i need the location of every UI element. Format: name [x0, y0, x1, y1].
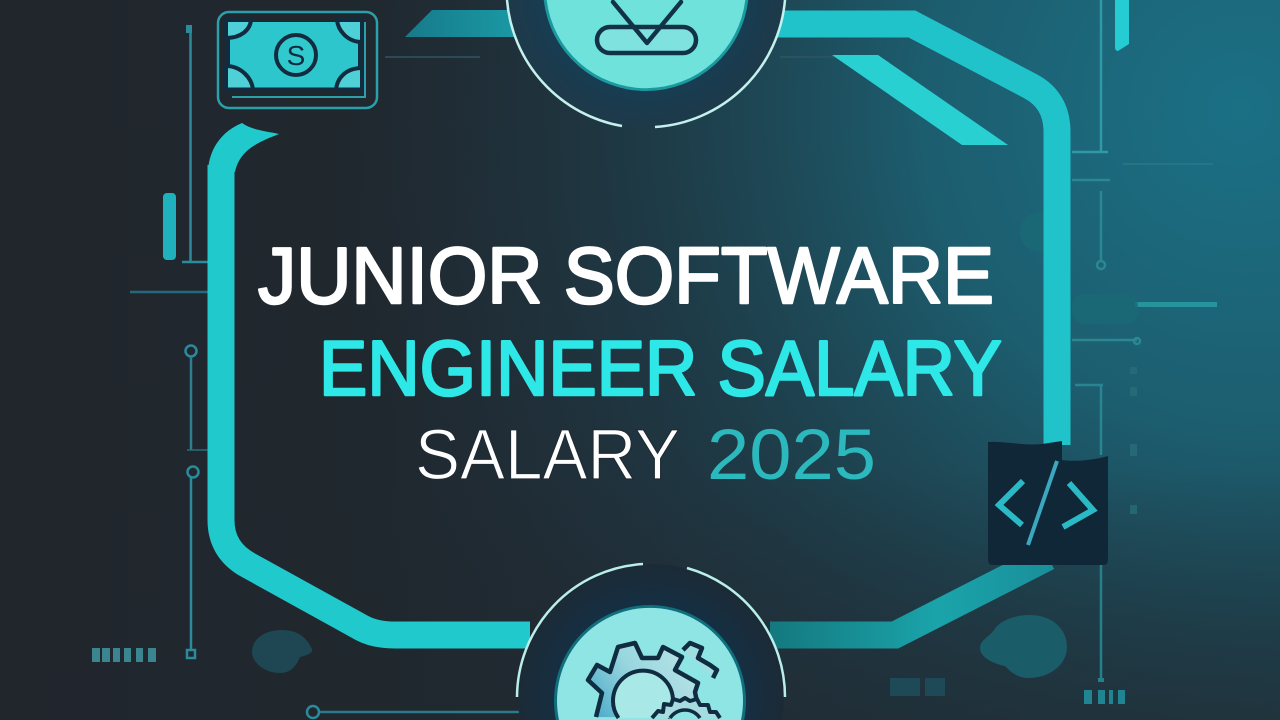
title line 1: JUNIOR SOFTWARE — [258, 231, 994, 320]
bottom dash marks — [890, 678, 945, 696]
left circuit lines — [130, 25, 520, 718]
top circle disc — [544, 0, 748, 91]
right blob — [980, 615, 1067, 678]
bill under-stroke — [232, 22, 365, 97]
icon: money bill — [218, 12, 377, 108]
top circle badge — [507, 0, 785, 127]
small gear hub — [670, 710, 700, 718]
right dash marks — [1084, 690, 1125, 704]
bill dollar sign: S — [287, 40, 305, 71]
icon: download arrow — [597, 2, 696, 53]
frame: top-right triangle — [832, 55, 1008, 145]
frame: main outline — [208, 24, 1057, 635]
right pill — [1115, 0, 1129, 51]
slash — [1028, 461, 1057, 545]
right bar — [1135, 302, 1217, 307]
frame: left and bottom-left band — [208, 123, 530, 635]
icon: code tag box — [988, 441, 1108, 565]
bill body — [228, 22, 360, 88]
left pill — [163, 193, 176, 260]
big gear — [588, 643, 700, 718]
faint top lines — [385, 56, 840, 58]
bill corners — [226, 20, 362, 90]
icon: gears — [588, 643, 720, 718]
small gear — [652, 698, 720, 718]
bill frame — [218, 12, 377, 108]
back gear — [683, 643, 717, 678]
left blob — [252, 630, 312, 673]
chevron left — [999, 481, 1023, 525]
right circuit lines — [1072, 0, 1213, 680]
bill coin — [276, 35, 316, 75]
bottom circle disc — [554, 605, 746, 720]
bottom circle arcs — [517, 564, 643, 697]
frame: bottom-right band — [770, 557, 1048, 635]
frame: top-right and right band — [770, 24, 1057, 445]
big gear hub — [613, 671, 673, 718]
title line 3: salary: SALARY — [415, 416, 680, 495]
title line 3: year: 2025 — [707, 416, 876, 495]
right dots — [1130, 367, 1137, 514]
top circle arcs — [507, 0, 622, 126]
left dash marks — [92, 648, 156, 662]
title — [258, 231, 1002, 495]
title line 2: ENGINEER SALARY — [319, 324, 1002, 412]
right soft blocks — [1020, 212, 1138, 324]
frame: top-left band — [405, 10, 520, 37]
chevron right — [1063, 483, 1093, 527]
bottom circle badge — [517, 564, 785, 720]
